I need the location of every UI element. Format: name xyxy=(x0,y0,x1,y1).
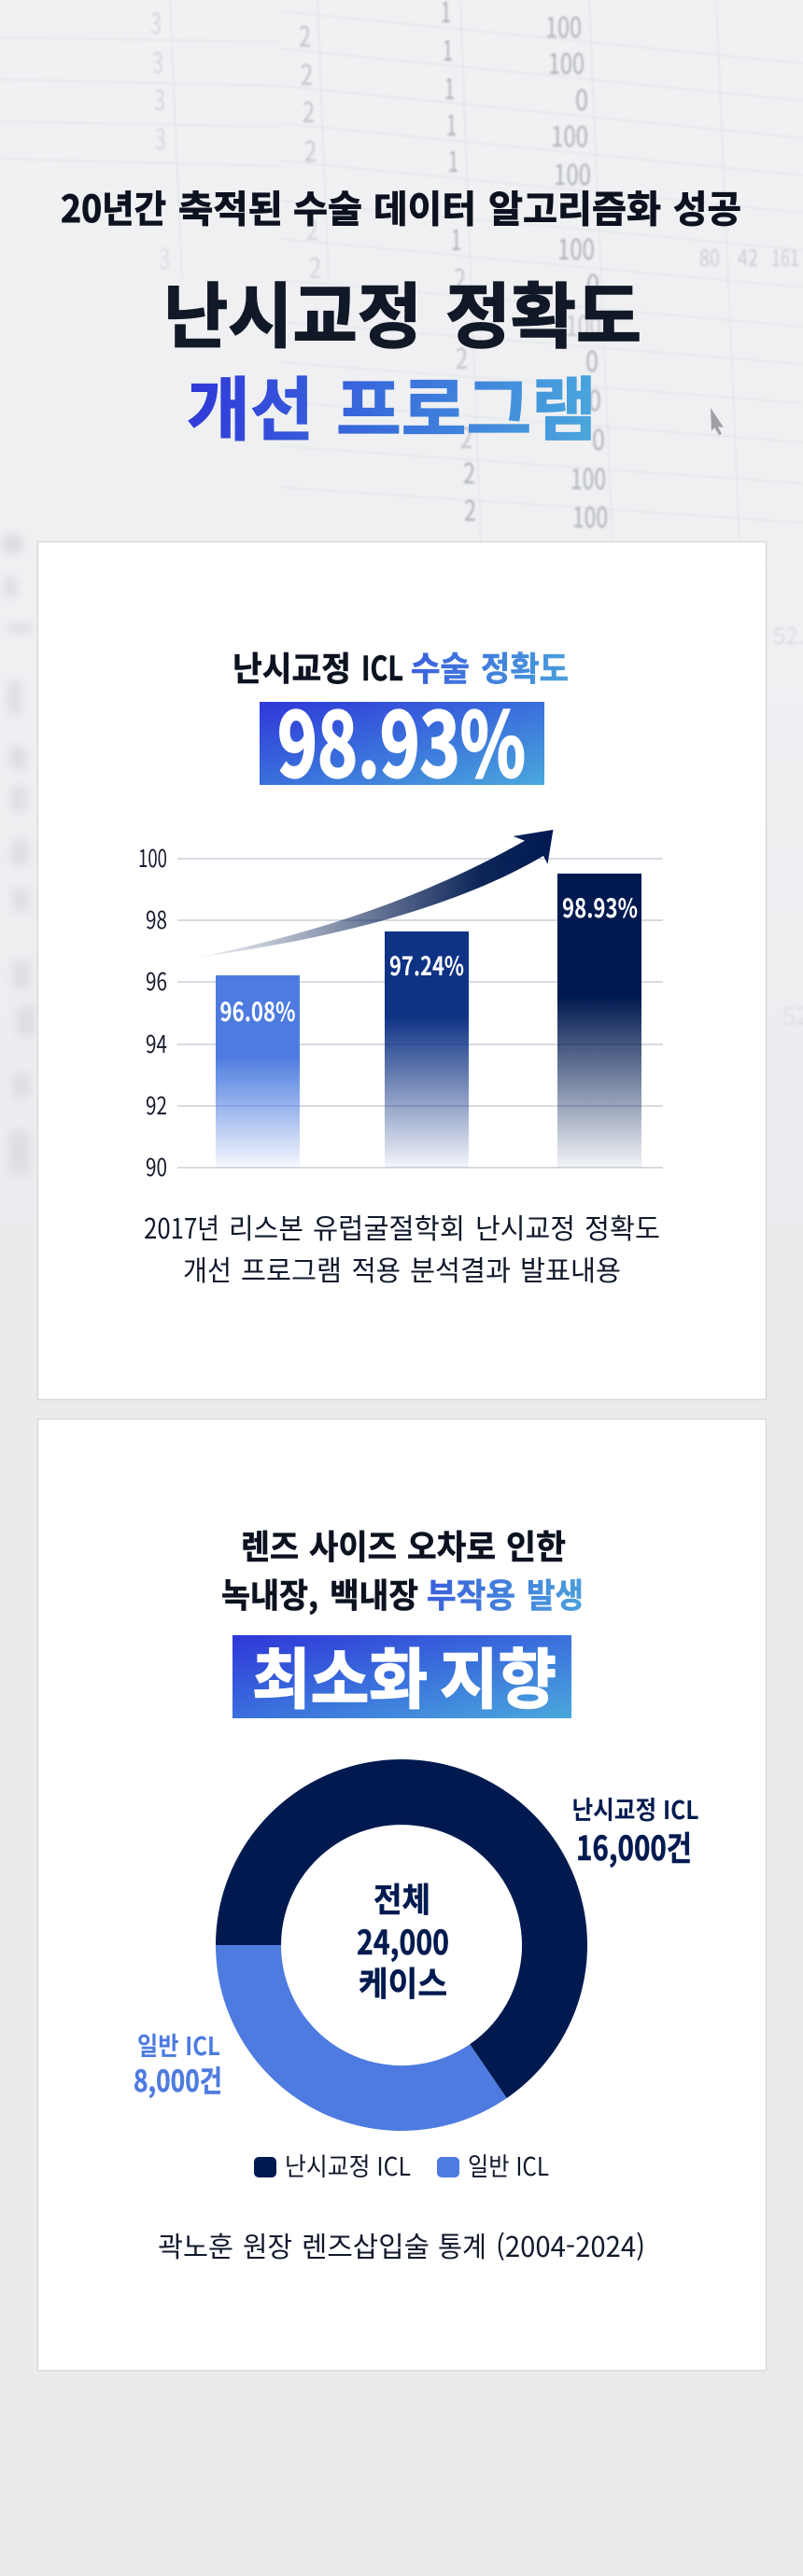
caption: study source: 분석결과 xyxy=(410,1248,511,1289)
segment: toric ICL 16,000 xyxy=(216,1759,587,2098)
heading: accuracy: 난시교정 xyxy=(232,642,351,691)
legend xyxy=(254,2147,549,2183)
title line 3 gradient: 개선 xyxy=(187,355,314,455)
segment: general ICL 8,000 xyxy=(216,1945,507,2131)
background photo: blurred spreadsheet xyxy=(0,0,803,1223)
heading: accuracy: ICL xyxy=(361,642,403,691)
highlight: minimization: 지향 xyxy=(440,1628,556,1722)
background photo: blurred spreadsheet: 1 xyxy=(448,139,458,180)
title block xyxy=(61,179,741,455)
background photo: blurred spreadsheet: 2 xyxy=(454,257,466,298)
heading: lens size error: 인한 xyxy=(506,1520,566,1569)
caption: study source xyxy=(144,1206,660,1289)
heading: lens size error: 백내장 xyxy=(330,1569,418,1617)
title line 1: 데이터 xyxy=(373,179,476,233)
caption: statistics source xyxy=(158,2224,645,2265)
title line 2: 난시교정 xyxy=(163,259,422,362)
axis labels: 96 xyxy=(146,963,167,998)
caption: study source: 유럽굴절학회 xyxy=(313,1206,465,1247)
caption: statistics source: 렌즈삽입술 xyxy=(302,2224,430,2265)
bar: 97.24% xyxy=(385,931,469,1168)
icon: mouse cursor xyxy=(711,408,724,435)
background photo: blurred spreadsheet: 1 xyxy=(451,217,461,259)
bar: 98.93%: 98.93% xyxy=(562,889,638,926)
label: toric ICL: 16,000건 xyxy=(576,1822,692,1870)
heading: accuracy: 정확도 xyxy=(481,642,569,691)
background photo: blurred spreadsheet: 2 xyxy=(309,245,321,287)
bar: 97.24%: 97.24% xyxy=(389,946,464,984)
title line 1: 성공 xyxy=(673,179,741,233)
background photo: blurred spreadsheet: 42 xyxy=(738,240,758,273)
caption: statistics source: 통계 xyxy=(438,2224,486,2265)
bar: 98.93% xyxy=(557,874,641,1168)
bar: 96.08% xyxy=(216,975,300,1168)
background photo: blurred spreadsheet: 1 xyxy=(443,28,453,69)
background photo: blurred spreadsheet: 2 xyxy=(303,90,315,131)
label: toric ICL xyxy=(571,1790,698,1870)
heading: lens size error: 발생 xyxy=(527,1569,584,1617)
heading: lens size error: 사이즈 xyxy=(309,1520,397,1569)
caption: study source: 리스본 xyxy=(229,1206,303,1247)
background photo: blurred spreadsheet: 2 xyxy=(464,488,476,529)
background photo: blurred spreadsheet: 3 xyxy=(150,1,162,42)
title line 1: 축적된 xyxy=(178,179,283,233)
heading: accuracy xyxy=(232,642,569,691)
heading: lens size error: 렌즈 xyxy=(241,1520,299,1569)
bar: 96.08%: 96.08% xyxy=(220,992,296,1029)
background photo: blurred spreadsheet: 0 xyxy=(575,77,588,119)
background photo: blurred spreadsheet: 1 xyxy=(444,66,455,107)
background photo: blurred spreadsheet: 1 xyxy=(446,103,457,144)
background photo: blurred spreadsheet: 2 xyxy=(299,14,311,55)
caption: study source: 개선 xyxy=(183,1248,232,1289)
caption: study source: 2017년 xyxy=(144,1206,219,1247)
background photo: blurred spreadsheet: 100 xyxy=(548,41,585,82)
axis labels: 94 xyxy=(146,1026,167,1060)
title line 2: 정확도 xyxy=(445,259,641,362)
background photo: blurred spreadsheet: 2 xyxy=(460,415,472,456)
caption: study source: 난시교정 xyxy=(475,1206,575,1247)
caption: statistics source: 원장 xyxy=(243,2224,292,2265)
background photo: blurred spreadsheet: 2 xyxy=(301,52,313,93)
title line 1: 알고리즘화 xyxy=(488,179,661,233)
caption: study source: 프로그램 xyxy=(241,1248,342,1289)
background photo: blurred spreadsheet: 3 xyxy=(152,40,163,81)
legend: 난시교정 ICL xyxy=(285,2147,411,2183)
background photo: blurred spreadsheet: 2 xyxy=(456,336,468,377)
arrow: rising trend xyxy=(190,830,553,959)
background photo: blurred spreadsheet: 100 xyxy=(551,114,588,155)
caption: statistics source: (2004-2024) xyxy=(496,2224,645,2265)
title line 3 gradient: 프로그램 xyxy=(336,355,597,455)
background photo: blurred spreadsheet: 3 xyxy=(159,236,170,277)
title line 1: 20년간 xyxy=(61,179,166,233)
highlight: minimization: 최소화 xyxy=(252,1628,428,1722)
background photo: blurred spreadsheet: 2 xyxy=(463,451,475,492)
axis labels: 100 xyxy=(138,840,167,875)
axis labels: 92 xyxy=(146,1087,167,1122)
label: toric ICL: 난시교정 ICL xyxy=(571,1790,698,1827)
title line 1: 수술 xyxy=(293,179,362,233)
background photo: blurred spreadsheet: 100 xyxy=(554,152,591,193)
background photo: blurred spreadsheet: 100 xyxy=(545,5,582,46)
title line 3 gradient xyxy=(187,355,597,455)
background photo: blurred spreadsheet: 100 xyxy=(557,227,595,268)
background photo: blurred spreadsheet: 3 xyxy=(155,117,166,158)
background photo: blurred spreadsheet: 100 xyxy=(571,456,606,497)
heading: accuracy: 수술 xyxy=(411,642,470,691)
background photo: blurred spreadsheet: 80 xyxy=(699,240,720,273)
background photo: blurred spreadsheet: 100 xyxy=(572,495,608,536)
background photo: blurred spreadsheet: 0 xyxy=(592,417,605,458)
label: general ICL: 8,000건 xyxy=(134,2058,222,2101)
heading: lens size error: 녹내장, xyxy=(221,1569,318,1617)
background photo: blurred spreadsheet: 100 xyxy=(566,303,601,344)
heading: lens size error: 오차로 xyxy=(407,1520,496,1569)
caption: statistics source: 곽노훈 xyxy=(158,2224,233,2265)
title line 2 xyxy=(163,259,641,362)
highlight: minimization xyxy=(232,1628,571,1722)
caption: study source: 정확도 xyxy=(585,1206,660,1247)
donut center total xyxy=(357,1873,449,2006)
caption: study source: 발표내용 xyxy=(520,1248,621,1289)
heading: lens size error xyxy=(221,1520,584,1617)
panel: surgical accuracy xyxy=(37,541,766,1400)
background photo: blurred spreadsheet: 3 xyxy=(154,77,165,119)
background photo: blurred spreadsheet: 0 xyxy=(586,262,599,303)
heading: lens size error: 부작용 xyxy=(427,1569,515,1617)
background photo: blurred spreadsheet: 0 xyxy=(588,378,601,419)
donut center total: 전체 xyxy=(373,1873,430,1922)
panel: complication minimization xyxy=(37,1419,766,2371)
label: general ICL: 일반 ICL xyxy=(137,2026,220,2063)
bar chart xyxy=(138,830,663,1183)
title line 1 xyxy=(61,179,741,233)
donut center total: 케이스 xyxy=(359,1957,447,2006)
label: general ICL xyxy=(134,2026,222,2101)
highlight: 98.93%: 98.93% xyxy=(277,675,526,803)
donut center total: 24,000 xyxy=(357,1916,449,1965)
background photo: blurred spreadsheet: 2 xyxy=(306,207,318,248)
background photo: blurred spreadsheet: 0 xyxy=(585,339,599,380)
axis labels xyxy=(138,840,167,1183)
legend: 일반 ICL xyxy=(468,2147,549,2183)
donut chart xyxy=(134,1759,698,2131)
axis labels: 90 xyxy=(146,1149,167,1183)
background photo: blurred spreadsheet: 2 xyxy=(304,129,317,170)
caption: study source: 적용 xyxy=(351,1248,401,1289)
axis labels: 98 xyxy=(146,902,167,936)
